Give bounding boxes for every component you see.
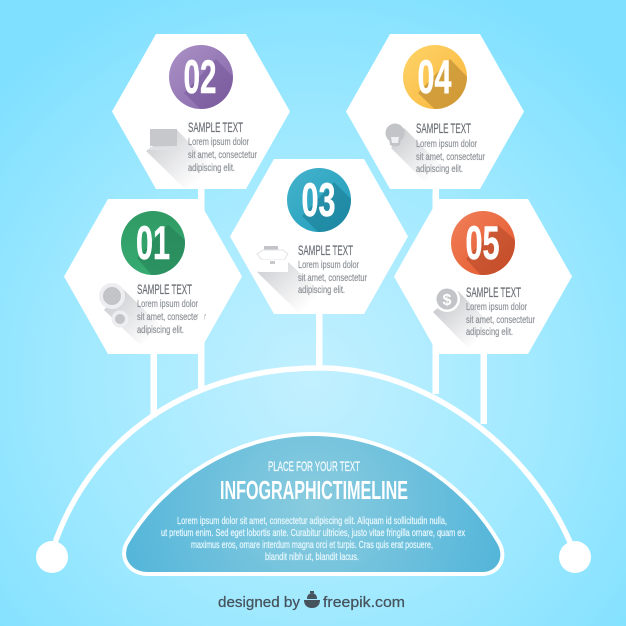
badge 05 — [451, 211, 515, 275]
text block 01: adipiscing elit. — [137, 324, 184, 336]
text block 02: adipiscing elit. — [188, 162, 235, 174]
text block 05 — [466, 301, 535, 338]
footer credit — [218, 591, 405, 611]
icon: gears — [99, 283, 156, 340]
panel: hexagon 03 — [230, 159, 408, 314]
text block 04 — [416, 138, 485, 175]
text block 01 — [137, 298, 206, 336]
badge 01 — [121, 211, 185, 275]
text block 04: sit amet, consectetur — [416, 151, 485, 163]
panel: hexagon 04 — [346, 34, 524, 189]
badge 05: 05 — [466, 216, 500, 269]
body text: blandit nibh ut, blandit lacus. — [265, 551, 359, 563]
text block 03: adipiscing elit. — [298, 284, 345, 296]
heading: sample text 05: SAMPLE TEXT — [466, 284, 521, 300]
connector stems — [150, 185, 487, 424]
heading: sample text 04: SAMPLE TEXT — [416, 120, 471, 136]
panel: hexagon 02 — [112, 34, 290, 189]
text block 02: Lorem ipsum dolor — [188, 136, 249, 148]
timeline arc with end dots — [36, 368, 591, 573]
icon: dollar coin: $ — [443, 292, 452, 309]
body text: ut pretium enim. Sed eget lobortis ante. Curabitur ultricies, justo vitae fringilla ornare, quam ex — [161, 527, 466, 539]
text block 04: Lorem ipsum dolor — [416, 138, 477, 150]
panel: hexagon 01 — [64, 199, 242, 354]
stem overlapping hexagon 01 — [198, 199, 204, 354]
heading: sample text 03: SAMPLE TEXT — [298, 242, 353, 258]
title: INFOGRAPHICTIMELINE — [220, 475, 408, 505]
text block 05: sit amet, consectetur — [466, 314, 535, 326]
text block 05: adipiscing elit. — [466, 326, 513, 338]
badge 04: 04 — [418, 50, 452, 103]
icon: open box — [256, 246, 313, 306]
heading: sample text 02: SAMPLE TEXT — [188, 119, 243, 135]
icon: light bulb — [386, 124, 436, 176]
icon: freepik logo — [304, 591, 320, 608]
icon: monitor — [146, 129, 206, 184]
panel: hexagon 05 — [394, 199, 572, 354]
text block 03: sit amet, consectetur — [298, 272, 367, 284]
body text: Lorem ipsum dolor sit amet, consectetur adipiscing elit. Aliquam id sollicitudin nulla, — [177, 515, 447, 527]
badge 02 — [169, 45, 233, 109]
heading: sample text 01: SAMPLE TEXT — [137, 281, 192, 297]
badge 03 — [287, 168, 351, 232]
text block 03: Lorem ipsum dolor — [298, 259, 359, 271]
text block 01: sit amet, consectetur — [137, 311, 206, 323]
body text — [161, 515, 466, 563]
badge 04 — [403, 45, 467, 109]
badge 03: 03 — [302, 173, 336, 226]
text block 05: Lorem ipsum dolor — [466, 301, 527, 313]
text block 02 — [188, 136, 257, 174]
footer credit: freepik.com — [323, 594, 405, 611]
body text: maximus eros, ornare interdum magna orci et turpis. Cras quis erat posuere, — [191, 539, 433, 551]
badge 02: 02 — [184, 50, 216, 103]
text block 01: Lorem ipsum dolor — [137, 298, 198, 310]
text block 02: sit amet, consectetur — [188, 149, 257, 161]
panel: central dome — [124, 434, 502, 574]
icon: dollar coin — [433, 288, 486, 344]
subheading: PLACE FOR YOUR TEXT — [268, 458, 360, 474]
badge 01: 01 — [136, 216, 170, 269]
text block 04: adipiscing elit. — [416, 163, 463, 175]
footer credit: designed by — [218, 594, 300, 611]
text block 03 — [298, 259, 367, 296]
